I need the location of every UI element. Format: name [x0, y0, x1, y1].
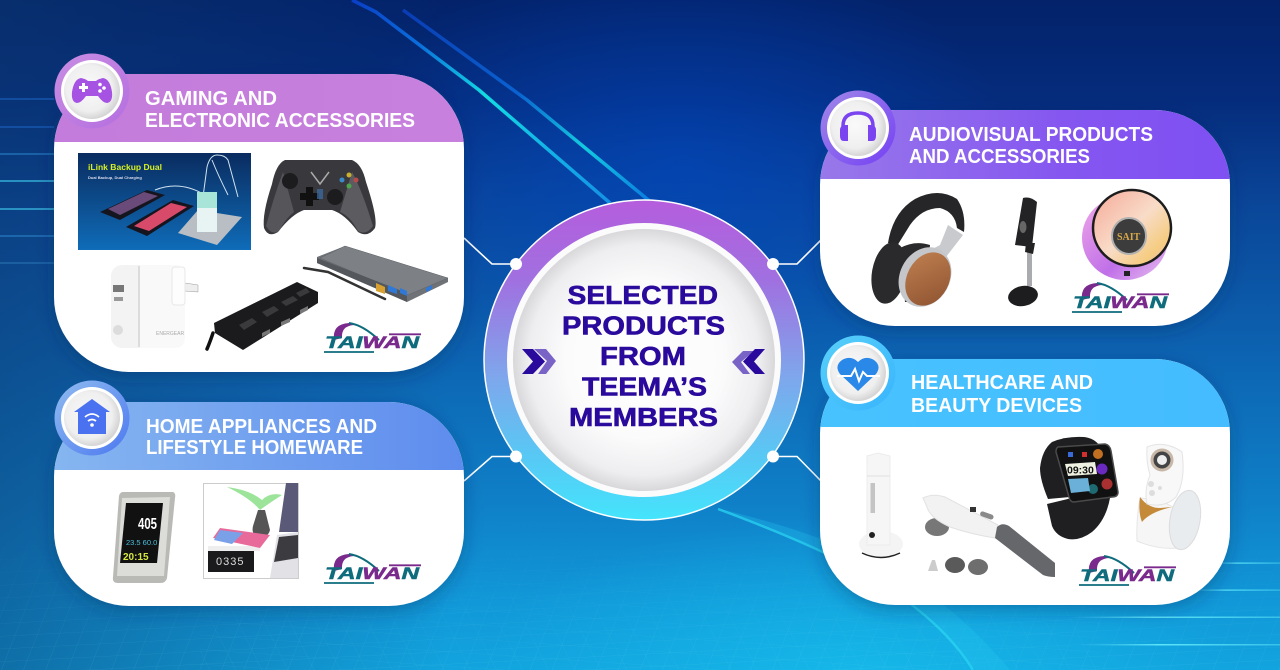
- logo: Taiwan (home): [324, 554, 421, 583]
- product: smartwatch: [1040, 437, 1118, 539]
- product: wooden headphones: [867, 193, 964, 316]
- header: home: [54, 402, 464, 470]
- product: iLink charger photo: iLink Backup Dual: [88, 162, 162, 172]
- hub title: TEEMA’S: [582, 374, 707, 402]
- connector nodes: [510, 258, 779, 462]
- hub title: FROM: [600, 343, 686, 371]
- product: air quality monitor: 20:15: [123, 552, 149, 563]
- heading: home: LIFESTYLE HOMEWARE: [146, 437, 363, 459]
- heading: gaming: [145, 88, 415, 132]
- heading: healthcare: [911, 372, 1093, 417]
- product: white wall charger: ENERGEAR: [156, 331, 184, 337]
- panel: healthcare and beauty devices: [820, 336, 1230, 605]
- product: white facial device: [859, 453, 903, 558]
- product: massager: [923, 495, 1055, 577]
- panel: gaming and electronic accessories: [54, 54, 464, 372]
- product: iLink charger photo: Dual Backup, Dual Charging: [88, 175, 142, 180]
- logo: Taiwan (audiovisual): TAI WA N: [1073, 293, 1168, 312]
- hub title: SELECTED: [568, 282, 718, 310]
- product: air quality monitor: 405: [138, 516, 157, 533]
- header: audiovisual: [820, 110, 1230, 179]
- logo: Taiwan (healthcare): TAI WA N: [1080, 566, 1175, 585]
- product: LED fan: [1082, 190, 1171, 280]
- product: white wall charger: [111, 265, 198, 348]
- heading: gaming: ELECTRONIC ACCESSORIES: [145, 110, 415, 132]
- panel: audiovisual products and accessories: [820, 90, 1230, 326]
- heading: audiovisual: [909, 124, 1153, 168]
- logo: Taiwan (home): TAI WA N: [325, 564, 420, 583]
- header: gaming: [54, 74, 464, 142]
- header: healthcare: [820, 359, 1230, 427]
- product: air quality monitor: 23.5 60.0: [126, 538, 157, 547]
- logo: Taiwan (audiovisual): [1072, 283, 1169, 312]
- icon: headphones: [820, 90, 896, 166]
- product: game controller: [264, 160, 376, 234]
- product: black USB hub: [207, 282, 318, 350]
- product: smartwatch: 09:30: [1067, 464, 1094, 476]
- right chevrons: [732, 349, 765, 374]
- left chevrons: [522, 349, 556, 374]
- product: USB-C docking station: [304, 246, 448, 302]
- product: wireless charging clock photo: 0335: [216, 556, 244, 568]
- logo: Taiwan (healthcare): [1079, 556, 1176, 585]
- hub title: PRODUCTS: [562, 312, 725, 340]
- product: iLink charger photo: [78, 153, 251, 250]
- product: beauty device: [1137, 444, 1205, 552]
- heading: audiovisual: AND ACCESSORIES: [909, 146, 1090, 168]
- product: wireless charging clock photo: [204, 483, 298, 578]
- heading: healthcare: BEAUTY DEVICES: [911, 395, 1082, 417]
- product: LED fan: SAIT: [1117, 232, 1141, 243]
- heading: gaming: GAMING AND: [145, 88, 277, 110]
- logo: Taiwan (gaming): TAI WA N: [325, 333, 420, 352]
- icon: smart home: [54, 380, 130, 456]
- icon: heartbeat: [820, 336, 896, 410]
- product: desktop microphone: [1006, 198, 1040, 308]
- heading: home: HOME APPLIANCES AND: [146, 416, 377, 438]
- heading: home: [146, 416, 377, 459]
- hub title: [562, 282, 725, 432]
- connector lines: [464, 238, 821, 481]
- panel: home appliances and lifestyle homeware: [54, 380, 464, 606]
- icon: gamepad: [54, 54, 130, 128]
- heading: healthcare: HEALTHCARE AND: [911, 372, 1093, 394]
- center hub: [484, 200, 804, 520]
- logo: Taiwan (gaming): [324, 323, 421, 352]
- product: air quality monitor: [113, 492, 175, 583]
- heading: audiovisual: AUDIOVISUAL PRODUCTS: [909, 124, 1153, 146]
- hub title: MEMBERS: [569, 404, 718, 432]
